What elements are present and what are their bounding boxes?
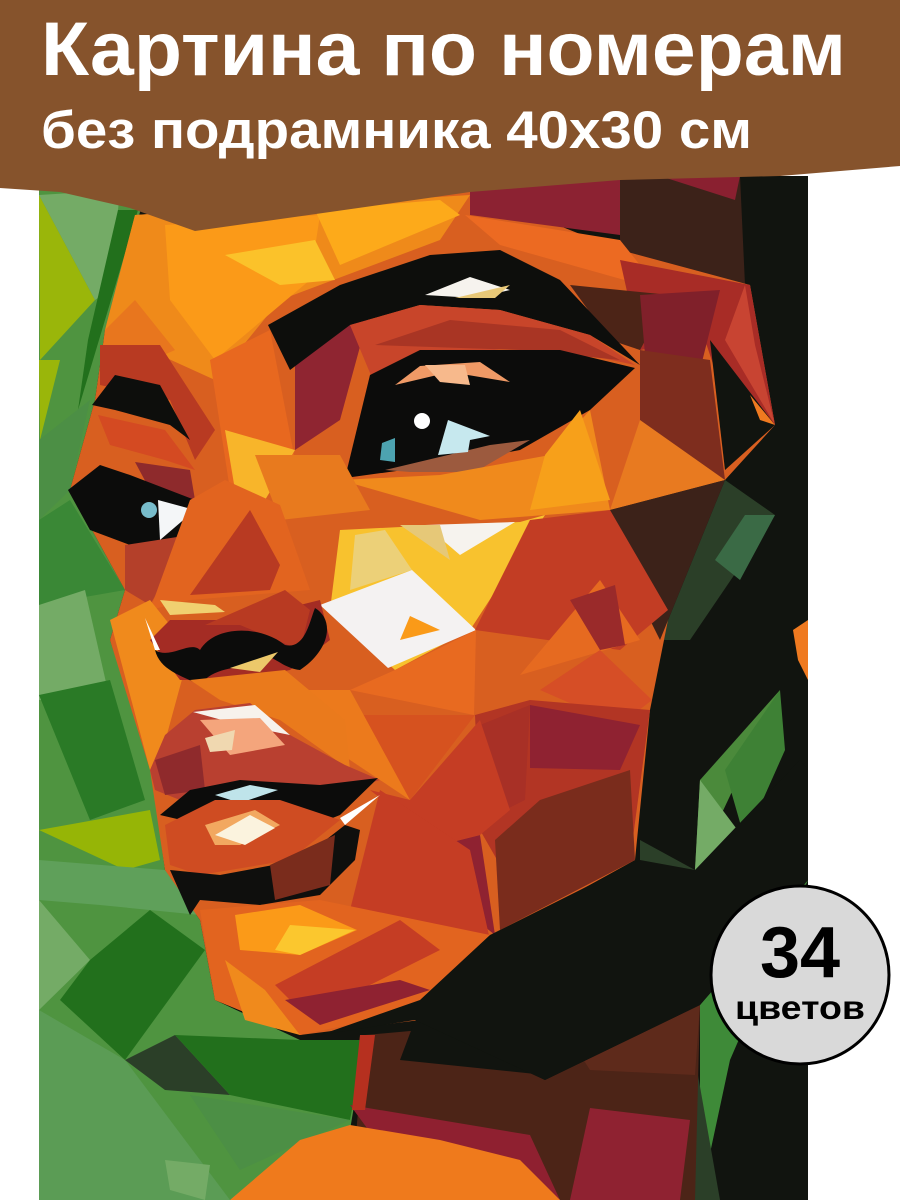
badge: 34 colours: цветов: [735, 989, 865, 1026]
title: Картина по номерам: [41, 7, 846, 92]
right eyebrow: [268, 250, 640, 370]
cheek and jaw left: [190, 670, 350, 770]
chin: [200, 900, 490, 1035]
badge: 34 colours: 34: [760, 913, 840, 993]
right side hair and green leaves: [620, 176, 808, 1200]
hair dark band over jaw: [320, 760, 808, 1080]
neck and shoulder: [230, 1000, 700, 1200]
cheek triangles: [225, 410, 668, 940]
subtitle: без подрамника 40х30 см: [41, 101, 752, 160]
badge: 34 colours: [711, 886, 889, 1064]
face base: [70, 190, 775, 1035]
left eye: [68, 375, 195, 605]
hair dark band: [415, 760, 808, 1080]
green foliage background: [39, 176, 365, 1200]
lips: [150, 703, 380, 915]
right eye area: [325, 305, 635, 485]
painting: polygonal portrait of a woman: [39, 176, 808, 1200]
nose: [110, 480, 330, 770]
forehead: [100, 176, 775, 640]
banner: brown header ribbon: [0, 0, 900, 231]
